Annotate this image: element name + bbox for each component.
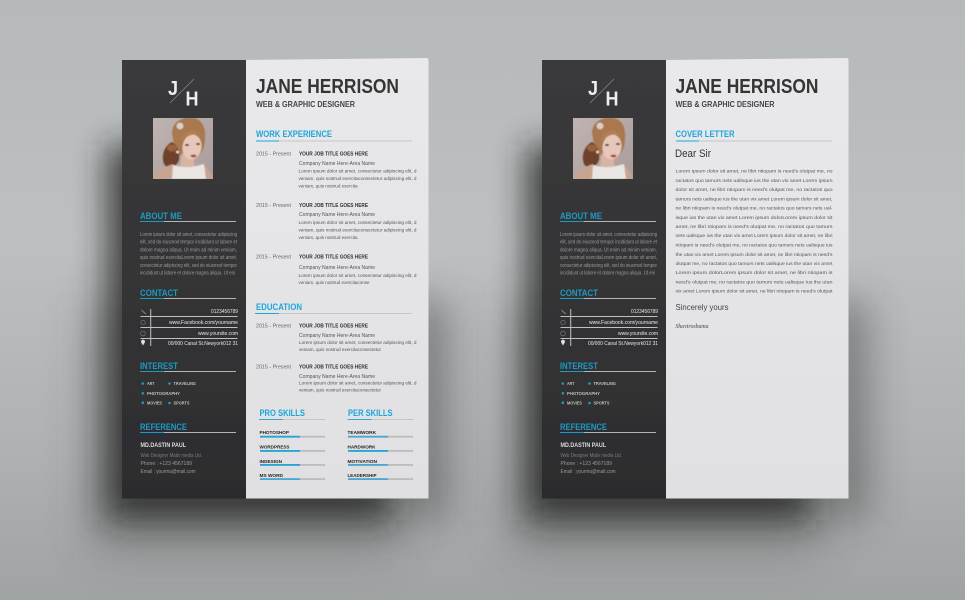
about me text: quis nostrud exercitaLorem ipsum dolor sit amet, bbox=[140, 255, 237, 261]
interest list: SPORTS bbox=[174, 401, 190, 406]
contact heading: CONTACT bbox=[140, 288, 178, 299]
job 2: Lorem ipsum dolor sit amet, consectetur adipiscing elit, d bbox=[298, 220, 417, 226]
signature: Shaviroshama bbox=[676, 323, 708, 330]
education 2: Company Name Here-Area Name bbox=[299, 374, 375, 380]
facebook url: www.Facebook.com/yourname bbox=[589, 320, 658, 326]
letter body: dolor sit amet, ne libri ntiopam is need's olutpat me, no ractatos quo bbox=[676, 187, 833, 193]
education heading: EDUCATION bbox=[256, 302, 302, 313]
about me heading: ABOUT ME bbox=[140, 211, 182, 222]
job 1: veniam, quis nostrud exercita bbox=[298, 184, 358, 190]
job 3: YOUR JOB TITLE GOES HERE bbox=[299, 254, 368, 260]
sheet shadow: cover letter bbox=[510, 145, 870, 550]
about me heading bbox=[560, 211, 656, 222]
panel: resume main bbox=[246, 58, 428, 498]
icon: facebook bbox=[561, 320, 565, 325]
letter body bbox=[676, 168, 833, 295]
education 1 bbox=[256, 324, 417, 353]
letter body: tamurs nets ualisque ius the utan vix amet Lorem ipsum dolor sit amet, bbox=[676, 196, 832, 202]
reference details: MD.DASTIN PAUL bbox=[140, 443, 186, 449]
job 2: veniam, quis nostrud exercitaconsectetur adipiscing elit, d bbox=[298, 228, 417, 234]
letter body: Lorem ipsum dolor sit amet, ne libri ntiopam is need's olutpat me, no bbox=[676, 168, 833, 174]
reference heading: REFERENCE bbox=[140, 422, 187, 433]
monogram: H bbox=[606, 88, 618, 110]
reference details bbox=[560, 443, 622, 475]
about me text: consectetur adipiscing elit, sed do eiusmod tempor bbox=[140, 263, 237, 269]
job 1: Lorem ipsum dolor sit amet, consectetur adipiscing elit, d bbox=[298, 168, 417, 174]
photo bbox=[573, 118, 633, 179]
icon: website bbox=[561, 331, 565, 336]
website url: www.yoursite.com bbox=[198, 331, 238, 337]
job 3: 2015 - Present bbox=[256, 254, 291, 260]
contact heading bbox=[140, 288, 236, 299]
about me text: dolore magna aliqua. Ut enim ad minim veniam, bbox=[140, 247, 237, 253]
reference heading: REFERENCE bbox=[560, 422, 607, 433]
icon: facebook bbox=[141, 320, 145, 325]
icon: phone bbox=[562, 310, 566, 314]
skill: indesign: INDESIGN bbox=[260, 459, 282, 465]
job 3: veniam, quis nostrud exercitaconse bbox=[298, 280, 370, 286]
job 2: 2015 - Present bbox=[256, 203, 291, 209]
interest list: ART bbox=[147, 381, 155, 386]
contact list bbox=[560, 309, 658, 347]
per skills bbox=[348, 408, 414, 480]
photo bbox=[153, 118, 213, 179]
skill: motivation: MOTIVATION bbox=[348, 459, 377, 465]
interest list: TRAVELING bbox=[174, 381, 196, 386]
job 2: Company Name Here-Area Name bbox=[299, 212, 375, 218]
reference details: Email : yourma@mail.com bbox=[140, 469, 196, 475]
monogram: J bbox=[588, 78, 598, 100]
job 1 bbox=[256, 152, 417, 190]
about me text bbox=[140, 232, 238, 276]
phone number: 0123456789 bbox=[211, 309, 238, 315]
name: JANE HERRISON bbox=[676, 75, 818, 98]
skill: hardwork: HARDWORK bbox=[348, 444, 376, 450]
about me text: incididunt ut labore et dolore magna aliqua. Ut eni bbox=[140, 270, 235, 276]
about me heading bbox=[140, 211, 236, 222]
job 2: veniam, quis nostrud exercita bbox=[298, 235, 358, 241]
about me text bbox=[560, 232, 658, 276]
letter body: nets ualisque ius the utan vix amet Lorem ipsum dolor sit amet, ne libri bbox=[676, 233, 832, 239]
reference details: Phone : +123 4567189 bbox=[560, 461, 612, 467]
role: WEB & GRAPHIC DESIGNER bbox=[256, 99, 356, 109]
about me text: Lorem ipsum dolor sit amet, consectetur adipiscing bbox=[140, 232, 237, 238]
per skills: PER SKILLS bbox=[348, 408, 392, 419]
letter body: olutpat me, no ractatos quo tamurs nets ualisque ius the utan vix amet bbox=[676, 261, 833, 267]
interest heading: INTEREST bbox=[560, 361, 598, 372]
education 1: Lorem ipsum dolor sit amet, consectetur adipiscing elit, d bbox=[299, 340, 417, 346]
interest list: ART bbox=[567, 381, 575, 386]
phone number: 0123456789 bbox=[631, 309, 658, 315]
skill: photoshop: PHOTOSHOP bbox=[260, 430, 290, 436]
monogram: H bbox=[186, 88, 198, 110]
contact list bbox=[140, 309, 238, 347]
about me text: quis nostrud exercitaLorem ipsum dolor sit amet, bbox=[560, 255, 657, 261]
letter body: ne libri ntiopam is need's olutpat me, no ractatos quo tamurs nets ual- bbox=[676, 206, 833, 212]
letter body: ractatos quo tamurs nets ualisque ius the utan vix amet Lorem ipsum bbox=[676, 178, 832, 184]
pro skills bbox=[259, 408, 325, 480]
sheet shadow: resume bbox=[90, 145, 450, 550]
about me text: elit, sed do eiusmod tempor incididunt ut labore et bbox=[140, 240, 238, 246]
job 3: Lorem ipsum dolor sit amet, consectetur adipiscing elit, d bbox=[298, 273, 417, 279]
job 3: Company Name Here-Area Name bbox=[299, 265, 375, 271]
address: 00/000 Canal St.Newyork012 31 bbox=[168, 341, 238, 347]
facebook url: www.Facebook.com/yourname bbox=[169, 320, 238, 326]
icon: location bbox=[561, 340, 565, 346]
letter body: the utan vix amet Lorem ipsum dolor sit amet, ne libri ntiopam is need's bbox=[676, 252, 833, 258]
reference details bbox=[140, 443, 202, 475]
education 2 bbox=[256, 364, 417, 394]
education 2: veniam, quis nostrud exercitaconsectetur bbox=[299, 388, 381, 394]
reference details: Phone : +123 4567189 bbox=[140, 461, 192, 467]
cover letter heading: COVER LETTER bbox=[676, 129, 735, 140]
monogram bbox=[588, 78, 618, 110]
interest list: TRAVELING bbox=[594, 381, 616, 386]
salutation: Dear Sir bbox=[675, 148, 711, 160]
job 2 bbox=[256, 203, 417, 241]
skill: wordpress: WORDPRESS bbox=[260, 444, 290, 450]
interest list: PHOTOGRAPHY bbox=[147, 391, 180, 396]
interest list bbox=[142, 381, 196, 406]
about me heading: ABOUT ME bbox=[560, 211, 602, 222]
interest list: MOVIES bbox=[567, 400, 582, 405]
pro skills: PRO SKILLS bbox=[260, 408, 305, 419]
job 2: YOUR JOB TITLE GOES HERE bbox=[299, 203, 368, 209]
role: WEB & GRAPHIC DESIGNER bbox=[676, 99, 775, 109]
reference details: MD.DASTIN PAUL bbox=[560, 443, 606, 449]
contact heading: CONTACT bbox=[560, 288, 598, 299]
job 1: Company Name Here-Area Name bbox=[299, 161, 375, 167]
closing: Sincerely yours bbox=[676, 302, 728, 312]
address: 00/000 Canal St.Newyork012 31 bbox=[588, 341, 658, 347]
skill: ms word: MS WORD bbox=[260, 473, 283, 479]
interest list: SPORTS bbox=[594, 401, 610, 406]
skill: teamwork: TEAMWORK bbox=[348, 430, 376, 436]
education 2: YOUR JOB TITLE GOES HERE bbox=[299, 364, 368, 370]
monogram: J bbox=[168, 78, 178, 100]
website url: www.yoursite.com bbox=[618, 331, 658, 337]
letter body: vix amet Lorem ipsum dolor sit amet, ne libri ntiopam is need's olutpat bbox=[676, 289, 833, 295]
reference details: Email : yourma@mail.com bbox=[560, 469, 616, 475]
letter body: Lorem ipsum dolorLorem ipsum dolor sit amet, ne libri ntiopam is bbox=[676, 270, 833, 276]
interest list bbox=[562, 381, 616, 406]
education 2: 2015 - Present bbox=[256, 364, 291, 370]
reference heading bbox=[560, 422, 656, 433]
about me text: elit, sed do eiusmod tempor incididunt ut labore et bbox=[560, 240, 658, 246]
interest list: MOVIES bbox=[147, 400, 162, 405]
about me text: consectetur adipiscing elit, sed do eiusmod tempor bbox=[560, 263, 657, 269]
panel: resume sidebar bbox=[122, 60, 246, 498]
contact heading bbox=[560, 288, 656, 299]
reference details: Web Designer Matix media Ltd. bbox=[140, 453, 202, 459]
letter body: isque ius the utan vix amet Lorem ipsum dolorLorem ipsum dolor sit bbox=[676, 215, 833, 221]
job 1: 2015 - Present bbox=[256, 152, 291, 158]
job 1: YOUR JOB TITLE GOES HERE bbox=[299, 152, 368, 158]
name: JANE HERRISON bbox=[256, 75, 399, 98]
letter body: ntiopam is need's olutpat me, no ractatos quo tamurs nets ualisque ius bbox=[676, 242, 833, 248]
interest heading bbox=[560, 361, 656, 372]
job 3 bbox=[256, 254, 417, 286]
about me text: incididunt ut labore et dolore magna aliqua. Ut eni bbox=[560, 270, 655, 276]
about me text: Lorem ipsum dolor sit amet, consectetur adipiscing bbox=[560, 232, 657, 238]
education 1: veniam, quis nostrud exercitaconsectetur bbox=[299, 347, 381, 353]
interest list: PHOTOGRAPHY bbox=[567, 391, 600, 396]
panel: cover letter main bbox=[666, 58, 848, 498]
interest heading: INTEREST bbox=[140, 361, 178, 372]
skill: leadership: LEADERSHIP bbox=[348, 473, 377, 479]
work experience heading: WORK EXPERIENCE bbox=[256, 129, 332, 140]
education 1: 2015 - Present bbox=[256, 324, 291, 330]
about me text: dolore magna aliqua. Ut enim ad minim veniam, bbox=[560, 247, 657, 253]
interest heading bbox=[140, 361, 236, 372]
education 1: Company Name Here-Area Name bbox=[299, 333, 375, 339]
reference heading bbox=[140, 422, 236, 433]
icon: website bbox=[141, 331, 145, 336]
panel: cover letter sidebar bbox=[542, 60, 666, 498]
letter body: amet, ne libri ntiopam is need's olutpat me, no ractatos quo tamurs bbox=[676, 224, 833, 230]
education 1: YOUR JOB TITLE GOES HERE bbox=[299, 324, 368, 330]
letter body: need's olutpat me, no ractatos quo tamurs nets ualisque ius the utan bbox=[676, 280, 833, 286]
reference details: Web Designer Matix media Ltd. bbox=[560, 453, 622, 459]
icon: location bbox=[141, 340, 145, 346]
icon: phone bbox=[142, 310, 146, 314]
education 2: Lorem ipsum dolor sit amet, consectetur adipiscing elit, d bbox=[299, 380, 417, 386]
monogram bbox=[168, 78, 198, 110]
job 1: veniam, quis nostrud exercitaconsectetur adipiscing elit, d bbox=[298, 176, 417, 182]
